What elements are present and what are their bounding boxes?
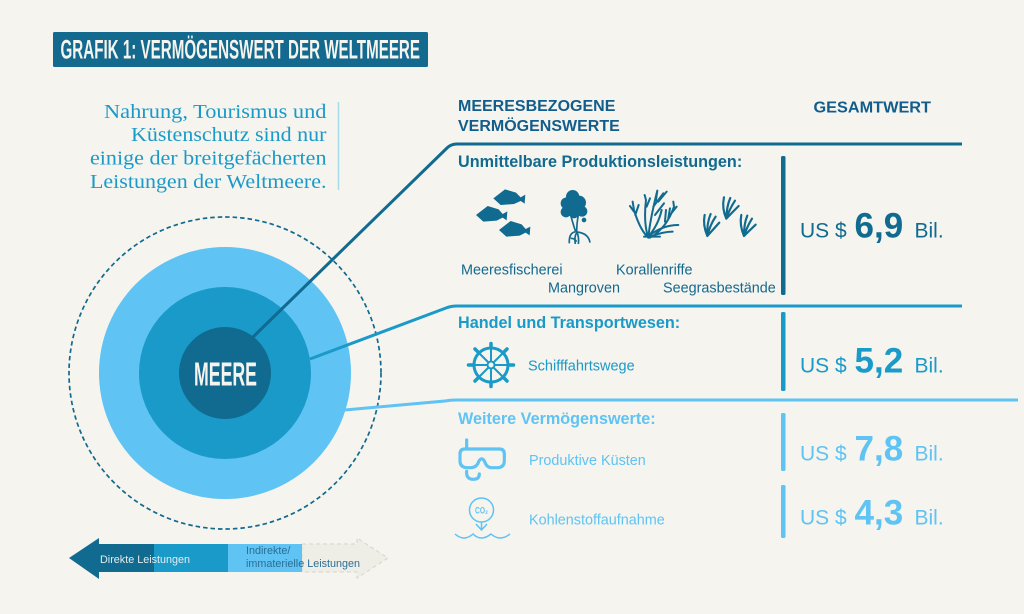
icon: mangrove — [561, 190, 590, 244]
legend arrow: Direkte Leistungen — [100, 554, 190, 566]
concentric circles diagram — [69, 217, 381, 529]
intro text block: Küstenschutz sind nur — [131, 124, 327, 146]
icon: fish — [476, 189, 530, 237]
value: 7,8: Bil. — [914, 442, 944, 466]
icon labels: production: Korallenriffe — [616, 262, 693, 278]
label: shipping routes: Schifffahrtswege — [528, 358, 635, 374]
intro text block: Leistungen der Weltmeere. — [90, 171, 326, 193]
value bar: 4,3 — [781, 485, 786, 538]
connector line: trade and transport — [310, 306, 962, 359]
value: 5,2: Bil. — [914, 354, 944, 378]
intro text block — [90, 101, 338, 193]
column heading: assets: MEERESBEZOGENE — [458, 98, 616, 115]
section heading: production: Unmittelbare Produktionsleistungen: — [458, 153, 742, 171]
intro text block: Nahrung, Tourismus und — [104, 101, 326, 123]
title banner: GRAFIK 1: VERMÖGENSWERT DER WELTMEERE — [60, 34, 420, 64]
legend arrow: immaterielle Leistungen — [246, 558, 360, 570]
connector line: other assets — [345, 400, 1018, 410]
value: 6,9: 6,9 — [854, 206, 903, 246]
icon labels: production: Meeresfischerei — [461, 262, 563, 278]
value: 7,8: 7,8 — [854, 430, 903, 468]
icon: coral — [630, 191, 678, 238]
value: 6,9: US $ — [800, 220, 847, 242]
icon labels: production: Seegrasbestände — [663, 280, 776, 296]
title banner — [53, 32, 428, 67]
intro text block: einige der breitgefächerten — [90, 148, 326, 170]
value: 5,2: US $ — [800, 354, 847, 378]
value bar: 6,9 — [781, 156, 786, 295]
label: productive coasts: Produktive Küsten — [529, 453, 646, 469]
concentric circles diagram: MEERE — [194, 356, 257, 392]
value bar: 5,2 — [781, 312, 786, 391]
label: carbon uptake: Kohlenstoffaufnahme — [529, 512, 665, 528]
icon labels: production — [461, 262, 776, 296]
value: 4,3: Bil. — [914, 506, 944, 530]
value bar: 7,8 — [781, 413, 786, 471]
value: 4,3: 4,3 — [854, 494, 903, 532]
value: 4,3: US $ — [800, 506, 847, 530]
column heading: assets: VERMÖGENSWERTE — [458, 116, 620, 135]
value: 5,2: 5,2 — [854, 342, 903, 380]
section heading: trade: Handel und Transportwesen: — [458, 314, 680, 332]
icon labels: production: Mangroven — [548, 280, 620, 296]
icon: seagrass — [704, 197, 756, 236]
value: 6,9: Bil. — [914, 220, 944, 242]
section heading: other assets: Weitere Vermögenswerte: — [458, 410, 656, 428]
icon: CO2 absorption — [455, 498, 510, 538]
connector line: direct production — [253, 144, 962, 337]
legend arrow — [69, 538, 388, 579]
value: 7,8: US $ — [800, 442, 847, 466]
legend arrow: Indirekte/ — [246, 545, 290, 557]
column heading: total value: GESAMTWERT — [814, 100, 931, 116]
icon: CO2 absorption: CO₂ — [475, 506, 488, 516]
icon: snorkel mask — [460, 440, 504, 479]
icon: ship wheel — [467, 343, 515, 387]
